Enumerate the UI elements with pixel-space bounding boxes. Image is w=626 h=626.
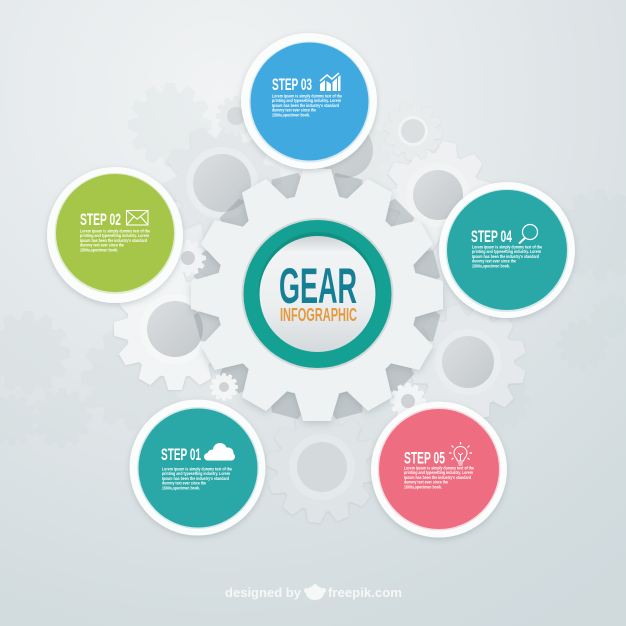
text block: 1500s,specimen book. [80, 247, 118, 252]
gear: behind step 3 right [292, 97, 398, 203]
icon: light bulb [449, 442, 472, 465]
gear: left [114, 268, 236, 390]
footer credit [225, 584, 402, 600]
gear: small top [216, 96, 256, 136]
text block: Lorem Ipsum is simply dummy text of the [472, 244, 542, 250]
footer credit: freepik.com [328, 585, 402, 600]
text block: dummy text ever since the [272, 108, 316, 113]
text block: printing and typesetting industry. Lorem [404, 470, 473, 475]
panel: step 5 [371, 402, 507, 538]
gear: small lower right [390, 383, 426, 419]
text block: 1500s,specimen book. [162, 485, 200, 490]
text block: Lorem Ipsum is simply dummy text of the [272, 94, 342, 98]
text block [162, 466, 232, 490]
icon: envelope [126, 210, 148, 225]
text block: Ipsum has been the industry's standard [404, 475, 471, 480]
panel: step 4 [439, 182, 575, 318]
title: gear: GEAR [279, 258, 357, 314]
shadow behind main gear [165, 144, 469, 448]
text block: dummy text ever since the [472, 259, 516, 264]
text block: Ipsum has been the industry's standard [472, 254, 539, 259]
icon: cloud [204, 443, 235, 460]
gear: small lower left [210, 373, 238, 401]
text block: 1500s,specimen book. [404, 484, 442, 489]
text block: printing and typesetting industry. Lorem [80, 233, 149, 238]
centre badge [242, 218, 394, 370]
text block: printing and typesetting industry. Lorem [472, 249, 541, 254]
panel: step 2 [47, 167, 183, 303]
text block: Ipsum has been the industry's standard [80, 238, 147, 243]
small gears group [170, 240, 426, 419]
text block: 1500s,specimen book. [272, 112, 310, 117]
text block: printing and typesetting industry. Lorem [272, 98, 341, 103]
heading: STEP 05 [404, 450, 445, 468]
text block: dummy text ever since the [162, 481, 206, 486]
panel: step 1 [130, 400, 266, 536]
text block: printing and typesetting industry. Lorem [162, 471, 230, 476]
icon: chart [320, 73, 340, 91]
gear: bottom [259, 404, 385, 530]
main gear [191, 169, 443, 421]
text block [80, 228, 150, 252]
text block: 1500s,specimen book. [472, 263, 510, 268]
text block: dummy text ever since the [404, 480, 448, 485]
text block [472, 244, 542, 268]
gear: upper right [373, 131, 503, 259]
background gears group [114, 96, 539, 530]
panel: step 3 [241, 33, 377, 169]
subtitle: infographic: INFOGRAPHIC [280, 304, 357, 325]
text block [272, 94, 342, 117]
gear: top left [154, 116, 290, 250]
heading: STEP 01 [161, 446, 201, 464]
text block: Lorem Ipsum is simply dummy text of the [80, 228, 150, 234]
icon: freepik logo [304, 584, 326, 600]
gear: lower right [397, 291, 539, 433]
text block: Lorem Ipsum is simply dummy text of the [162, 466, 232, 472]
gear: small left [170, 240, 206, 276]
faint background gears [0, 83, 626, 448]
heading: STEP 02 [80, 211, 121, 229]
text block: Ipsum has been the industry's standard [162, 476, 229, 481]
icon: magnifier [519, 224, 538, 244]
gear: small top right [380, 98, 446, 164]
text block: Ipsum has been the industry's standard [272, 103, 339, 108]
heading: STEP 03 [272, 76, 312, 94]
text block [404, 466, 474, 489]
text block: dummy text ever since the [80, 243, 124, 248]
footer credit: designed by [225, 585, 302, 600]
heading: STEP 04 [471, 228, 513, 246]
text block: Lorem Ipsum is simply dummy text of the [404, 466, 474, 470]
